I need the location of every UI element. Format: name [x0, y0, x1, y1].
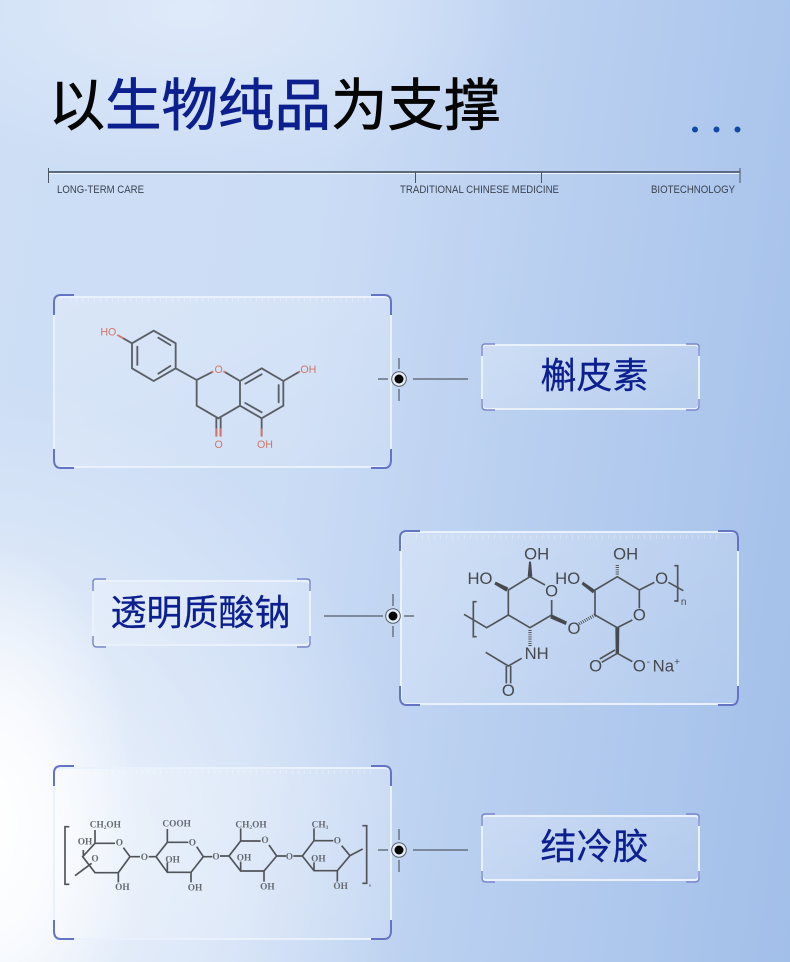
chemical structure: gellan gum: O: [261, 836, 269, 846]
chemical structure: gellan gum: O: [212, 852, 220, 862]
chemical structure: gellan gum: OH: [252, 821, 267, 831]
chemical structure: sodium hyaluronate: NH: [525, 644, 549, 663]
label: gellan gum: [482, 814, 699, 882]
chemical structure: sodium hyaluronate: O: [568, 619, 581, 638]
timeline label: biotechnology: BIOTECHNOLOGY: [651, 184, 736, 196]
panel: hyaluronate structure: [400, 531, 738, 705]
chemical structure: sodium hyaluronate: O: [502, 681, 515, 700]
chemical structure: gellan gum: 2: [104, 825, 107, 831]
chemical structure: flavanone: HO: [100, 327, 116, 339]
chemical structure: sodium hyaluronate: n: [681, 597, 686, 608]
timeline: [48, 168, 740, 196]
chemical structure: gellan gum: 2: [249, 825, 252, 831]
label: sodium hyaluronate: [93, 579, 310, 647]
chemical structure: sodium hyaluronate: O: [545, 582, 558, 601]
panel: gellan structure: [54, 766, 391, 939]
chemical structure: gellan gum: n: [369, 882, 372, 887]
chemical structure: sodium hyaluronate: +: [674, 657, 680, 668]
icon: target marker 3: [378, 829, 468, 872]
chemical structure: gellan gum: OH: [237, 854, 252, 864]
chemical structure: gellan gum: OH: [333, 882, 349, 892]
chemical structure: gellan gum: OH: [188, 883, 203, 893]
icon: three dots: [692, 126, 740, 132]
timeline label: long-term care: LONG-TERM CARE: [57, 184, 144, 196]
chemical structure: gellan gum: COOH: [162, 819, 192, 829]
chemical structure: sodium hyaluronate: OH: [524, 545, 549, 564]
icon: target marker 2: [324, 594, 414, 637]
chemical structure: sodium hyaluronate: O: [633, 657, 646, 676]
title: 以生物纯品为支撑: [48, 74, 500, 137]
chemical structure: gellan gum: O: [189, 838, 196, 848]
chemical structure: gellan gum: 3: [326, 825, 329, 831]
icon: target marker 1: [378, 358, 468, 401]
chemical structure: sodium hyaluronate: -: [647, 657, 650, 668]
chemical structure: sodium hyaluronate: HO: [555, 569, 580, 588]
chemical structure: sodium hyaluronate: O: [589, 657, 602, 676]
chemical structure: gellan gum: O: [286, 852, 293, 862]
chemical structure: gellan gum: OH: [115, 883, 130, 893]
chemical structure: sodium hyaluronate: OH: [613, 545, 638, 564]
chemical structure: flavanone: OH: [257, 439, 273, 451]
chemical structure: sodium hyaluronate: O: [655, 569, 668, 588]
chemical structure: sodium hyaluronate: Na: [653, 657, 675, 676]
chemical structure: flavanone: O: [215, 364, 223, 376]
panel: quercetin-type structure: [54, 295, 391, 468]
chemical structure: gellan gum: O: [116, 839, 123, 849]
chemical structure: flavanone: O: [215, 439, 223, 451]
label: quercetin: 槲皮素: [540, 355, 649, 396]
chemical structure: gellan gum: [65, 819, 372, 893]
chemical structure: gellan gum: OH: [165, 855, 181, 865]
chemical structure: sodium hyaluronate: HO: [468, 569, 493, 588]
chemical structure: gellan gum: OH: [106, 821, 122, 831]
chemical structure: flavanone: [100, 327, 316, 451]
chemical structure: gellan gum: CH: [235, 821, 249, 831]
label: sodium hyaluronate: 透明质酸钠: [110, 592, 291, 633]
chemical structure: sodium hyaluronate: O: [633, 606, 646, 625]
chemical structure: gellan gum: O: [141, 853, 148, 863]
chemical structure: gellan gum: O: [91, 855, 99, 865]
label: quercetin: [482, 344, 699, 410]
chemical structure: gellan gum: CH: [90, 821, 104, 831]
chemical structure: gellan gum: OH: [260, 883, 275, 893]
chemical structure: gellan gum: OH: [311, 854, 326, 864]
chemical structure: sodium hyaluronate: [464, 545, 686, 700]
chemical structure: gellan gum: OH: [78, 837, 93, 847]
label: gellan gum: 结冷胶: [540, 826, 649, 867]
chemical structure: gellan gum: O: [334, 837, 341, 847]
chemical structure: flavanone: OH: [300, 364, 316, 376]
chemical structure: gellan gum: CH: [312, 821, 326, 831]
timeline label: traditional chinese medicine: TRADITIONAL CHINESE MEDICINE: [400, 184, 559, 196]
